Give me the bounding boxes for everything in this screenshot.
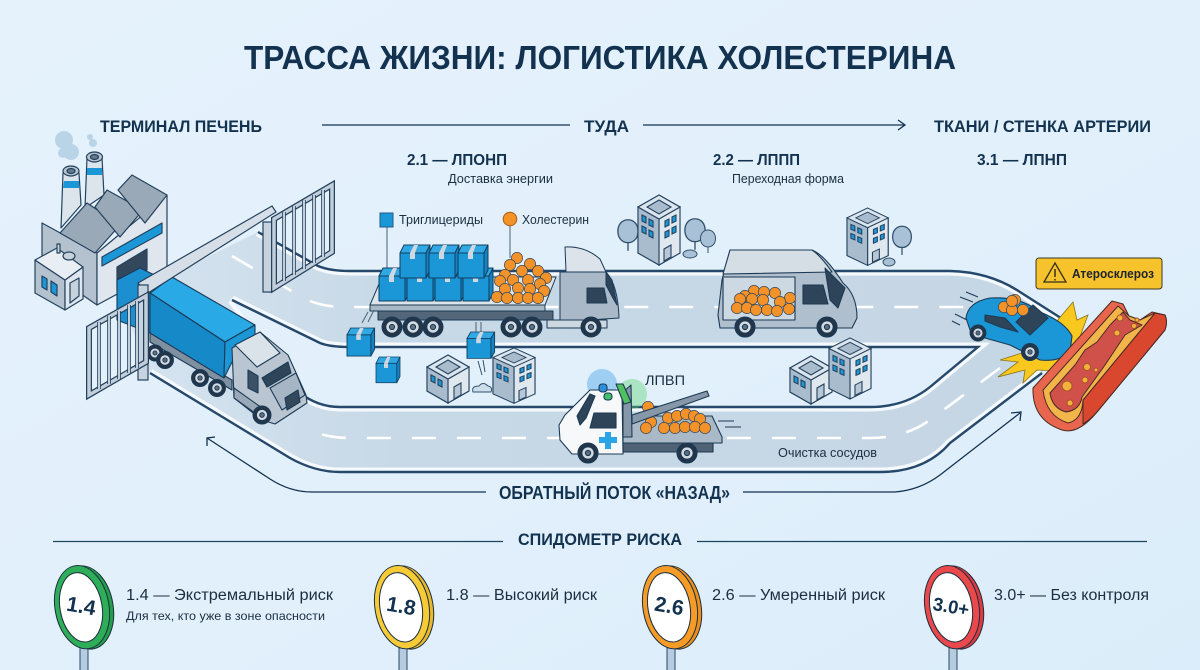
motion lines — [952, 292, 978, 325]
truck: tow truck HDL — [559, 369, 741, 463]
outer wall side — [1083, 313, 1166, 424]
sign: 2.6 — [636, 560, 708, 670]
smoke — [55, 131, 97, 160]
callout: atherosclerosis warning: Атеросклероз — [1072, 267, 1154, 281]
text: 1.8 high risk: 1.8 — Высокий риск — [446, 587, 597, 604]
label: there: ТУДА — [584, 117, 629, 136]
trailer front — [224, 325, 255, 378]
label: terminal liver: ТЕРМИНАЛ ПЕЧЕНЬ — [100, 117, 262, 136]
loading dock door — [117, 249, 147, 290]
car: LDL — [952, 292, 1072, 360]
legend: triglycerides: Триглицериды — [399, 213, 483, 227]
sawtooth roof — [60, 175, 167, 253]
post — [138, 285, 148, 380]
stage 2.1: 2.1 — ЛПОНП — [407, 152, 507, 169]
stage 2.1: Доставка энергии — [448, 172, 553, 186]
gate: far — [263, 185, 332, 292]
boom — [632, 391, 709, 424]
cargo window — [723, 277, 795, 320]
legend: cholesterol: Холестерин — [522, 213, 589, 227]
cholesterol balls — [491, 252, 552, 304]
boxes — [379, 245, 493, 301]
stage 2.2: 2.2 — ЛППП — [713, 152, 800, 169]
wheels — [147, 345, 163, 361]
label: vessel cleaning: Очистка сосудов — [778, 446, 877, 460]
flashing lights — [587, 369, 647, 409]
icon: falling boxes — [347, 328, 495, 383]
icon: factory liver terminal — [35, 131, 167, 310]
chimneys — [61, 152, 104, 228]
flatbed — [370, 277, 556, 305]
callout: atherosclerosis warning — [1036, 258, 1162, 289]
legend: cholesterol — [503, 212, 589, 258]
truck: flatbed VLDL — [362, 245, 619, 337]
cab — [559, 390, 623, 454]
van: IDL — [718, 250, 857, 337]
plaque particles — [1062, 315, 1139, 406]
motion lines — [718, 421, 741, 427]
cholesterol balls — [640, 401, 711, 434]
heading: return flow: ОБРАТНЫЙ ПОТОК «НАЗАД» — [499, 482, 730, 503]
annex — [35, 244, 83, 310]
cab — [547, 247, 619, 328]
wheels — [382, 317, 601, 337]
label: HDL: ЛПВП — [645, 373, 685, 388]
motion lines — [362, 310, 481, 334]
light bar — [599, 384, 607, 392]
stage 3.1: 3.1 — ЛПНП — [977, 152, 1067, 169]
overhead beam — [138, 206, 276, 293]
stage 2.2 — [713, 152, 844, 186]
van body — [718, 250, 857, 328]
icon: collision burst — [998, 302, 1088, 383]
car body — [966, 298, 1072, 360]
cholesterol balls — [731, 285, 796, 317]
label: tissues and artery wall: ТКАНИ / СТЕНКА АРТЕРИИ — [934, 117, 1151, 136]
sign: 2.6: 2.6 — [653, 593, 685, 620]
trailer side — [150, 293, 225, 378]
stage labels — [407, 152, 1067, 186]
sign: 1.4: 1.4 — [65, 593, 98, 620]
building walls — [42, 223, 97, 305]
text: 1.4 extreme risk — [126, 587, 333, 623]
cab — [232, 332, 307, 424]
medical cross — [599, 432, 617, 449]
arrow: return flow left — [207, 437, 486, 492]
sign: 1.8: 1.8 — [385, 593, 418, 620]
truck: blue box truck — [117, 268, 307, 424]
deck chassis — [623, 442, 713, 452]
wheels — [970, 325, 986, 341]
artery wall — [1033, 301, 1166, 431]
text: 3.0+ out of control: 3.0+ — Без контроля — [994, 587, 1149, 604]
road loop — [120, 232, 1070, 472]
text: 1.4 extreme risk: Для тех, кто уже в зоне опасности — [126, 609, 325, 623]
sign: 1.4 — [48, 560, 120, 670]
sign: 3.0+: 3.0+ — [931, 593, 971, 620]
icon: city and trees top — [618, 195, 911, 266]
arrow: forward flow — [322, 120, 905, 130]
chassis — [378, 311, 553, 320]
icon: artery cross-section — [1033, 301, 1166, 431]
trailer top — [150, 277, 255, 342]
plaque interior — [1043, 306, 1155, 423]
trailer rear inside terminal — [117, 268, 175, 333]
text: 1.4 extreme risk: 1.4 — Экстремальный риск — [126, 587, 333, 604]
chassis — [150, 333, 232, 390]
stage 2.2: Переходная форма — [732, 172, 844, 186]
lumen — [1050, 312, 1142, 412]
windows — [803, 285, 828, 304]
gate: near with beam — [89, 206, 276, 395]
sign: 3.0+ — [918, 560, 990, 670]
title: ТРАССА ЖИЗНИ: ЛОГИСТИКА ХОЛЕСТЕРИНА — [244, 39, 956, 76]
section heading: risk speedometer: СПИДОМЕТР РИСКА — [518, 531, 682, 549]
blue window strip — [102, 223, 162, 266]
icon: warning triangle — [1044, 263, 1066, 282]
lane markings — [232, 256, 1000, 438]
icon: city lower — [427, 338, 871, 404]
legend: triglycerides — [380, 213, 483, 268]
stage 2.1 — [407, 152, 553, 186]
cholesterol balls — [998, 294, 1029, 316]
wheels — [735, 317, 755, 337]
legend: triglycerides and cholesterol — [380, 212, 589, 268]
wheels — [578, 443, 598, 463]
sign: 1.8 — [368, 560, 440, 670]
header row: route labels — [100, 117, 1151, 136]
windows — [1016, 305, 1048, 335]
text: 2.6 moderate risk: 2.6 — Умеренный риск — [712, 587, 885, 604]
arrow: return flow right — [743, 412, 1021, 492]
